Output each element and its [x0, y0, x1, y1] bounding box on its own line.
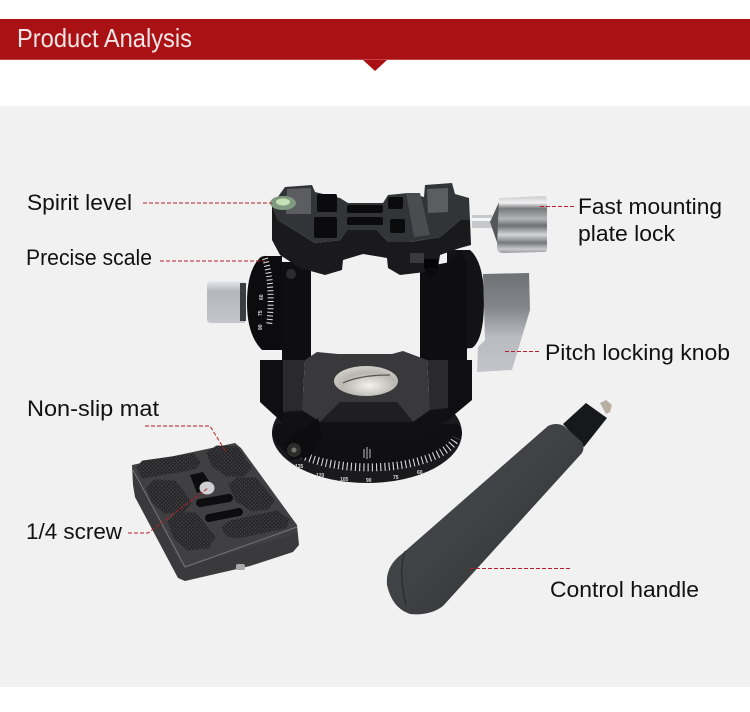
base plate top	[302, 351, 430, 422]
plate slots	[190, 472, 239, 518]
rotating base with degree scale	[272, 383, 462, 484]
plate edge highlight	[133, 470, 297, 567]
plate top face	[132, 443, 297, 567]
quarter-inch screw	[200, 482, 214, 494]
handle grip	[387, 424, 584, 614]
locking lever	[283, 418, 322, 460]
left tilt disc with scale: 90	[258, 324, 264, 330]
label: pitch locking knob: Pitch locking knob	[545, 340, 730, 365]
leader lines	[128, 203, 575, 568]
rotating base with degree scale: 120	[316, 473, 325, 479]
rotating base with degree scale: 60	[417, 470, 423, 476]
base shoulders	[260, 360, 472, 436]
label: control handle: Control handle	[550, 577, 699, 602]
right tilt disc	[447, 250, 484, 350]
left silver knob	[207, 281, 246, 323]
label: fast mounting plate lock	[578, 194, 722, 246]
clamp rulers	[286, 188, 448, 214]
handle cap seam	[402, 551, 406, 605]
handle stem	[563, 403, 607, 447]
spirit level	[270, 196, 296, 210]
clamp holes	[314, 194, 405, 238]
quick release plate	[132, 443, 299, 581]
label: fast mounting plate lock: Fast mounting	[578, 194, 722, 219]
handle screw tip	[600, 400, 612, 414]
pan-tilt head	[207, 183, 547, 484]
silver centre disc	[334, 366, 398, 396]
control handle	[387, 400, 612, 614]
left tilt disc with scale	[247, 255, 282, 350]
clamp jaw detail	[286, 253, 438, 279]
label: non-slip mat: Non-slip mat	[27, 396, 159, 421]
left arm	[282, 262, 311, 362]
label: spirit level: Spirit level	[27, 190, 132, 215]
rotating base with degree scale: 90	[366, 478, 372, 484]
title: Product Analysis	[17, 23, 192, 53]
plate bottom screw	[236, 564, 245, 570]
right pitch locking lever	[477, 273, 530, 372]
clamp top face	[272, 183, 470, 243]
right arm	[420, 250, 467, 360]
non-slip pads	[138, 447, 288, 549]
header banner	[0, 19, 750, 71]
plate side	[132, 465, 299, 581]
rotating base with degree scale: 105	[340, 477, 349, 483]
rotating base with degree scale: 135	[295, 464, 304, 470]
fast mounting lock knob	[472, 196, 547, 253]
clamp screw slot	[406, 193, 430, 237]
label: fast mounting plate lock: plate lock	[578, 221, 676, 246]
clamp lower body	[272, 205, 471, 275]
rotating base with degree scale: 75	[393, 475, 399, 481]
label: precise scale: Precise scale	[26, 245, 152, 270]
label: 1/4 screw: 1/4 screw	[26, 519, 122, 544]
front recess	[320, 402, 413, 422]
left tilt disc with scale: 75	[258, 310, 264, 316]
left tilt disc with scale: 60	[259, 294, 265, 300]
